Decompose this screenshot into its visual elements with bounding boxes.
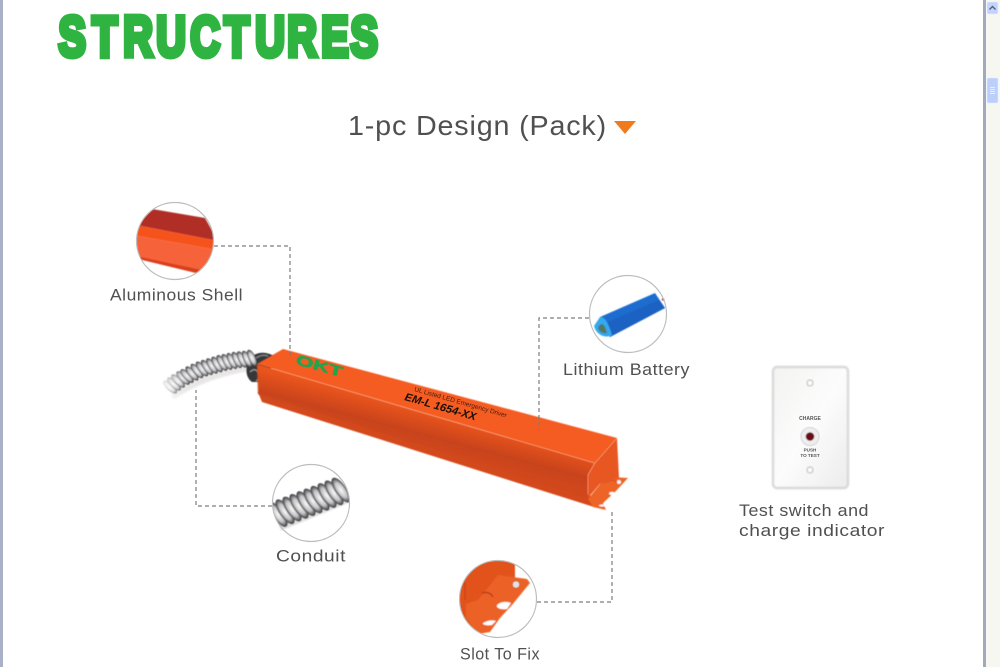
icon: conduit close-up — [265, 464, 354, 542]
flexible conduit on product — [158, 348, 276, 405]
callout: slot to fix — [455, 558, 540, 664]
label: test switch and charge indicator: Test switch and — [739, 501, 869, 520]
model number: EM-L 1654-XX — [403, 391, 478, 423]
leader: slot to fix — [537, 512, 612, 602]
label: test switch and charge indicator — [739, 501, 885, 540]
product: orange emergency driver — [257, 349, 628, 510]
side face — [257, 364, 595, 498]
leader: lithium battery — [539, 318, 589, 430]
label: Aluminous Shell — [110, 286, 243, 304]
heading: 1-pc design: 1-pc Design (Pack) — [348, 110, 607, 141]
scrollbar — [983, 0, 1000, 667]
callout: aluminous shell — [110, 202, 243, 304]
end face — [588, 438, 619, 498]
label: Lithium Battery — [563, 360, 690, 379]
label: test switch and charge indicator: charge indicator — [739, 521, 885, 540]
right mounting flange — [258, 392, 628, 510]
panel: test switch — [773, 367, 848, 488]
push to test label: PUSH — [804, 448, 817, 452]
push to test label line 2: TO TEST — [800, 453, 820, 458]
window left border — [0, 0, 3, 667]
label: Slot To Fix — [460, 644, 540, 664]
wall plate — [773, 367, 848, 488]
top face — [257, 349, 617, 463]
callout: conduit — [272, 464, 350, 562]
icon: orange down triangle — [614, 121, 636, 134]
indicator button — [801, 428, 819, 446]
icon: battery close-up — [590, 276, 666, 352]
brand logo: OKT — [294, 351, 345, 380]
top screw — [807, 380, 813, 386]
leader: aluminous shell — [214, 246, 290, 356]
label: Conduit — [276, 546, 346, 566]
icon: mounting slot close-up — [455, 558, 536, 640]
callout: lithium battery — [563, 276, 690, 379]
icon: aluminium shell close-up — [132, 202, 218, 280]
leader: conduit — [196, 390, 272, 506]
product caption: UL Listed LED Emergency Driver — [413, 386, 508, 420]
title: STRUCTURES — [58, 4, 378, 69]
charge label: CHARGE — [799, 416, 821, 422]
bottom screw — [807, 467, 813, 473]
